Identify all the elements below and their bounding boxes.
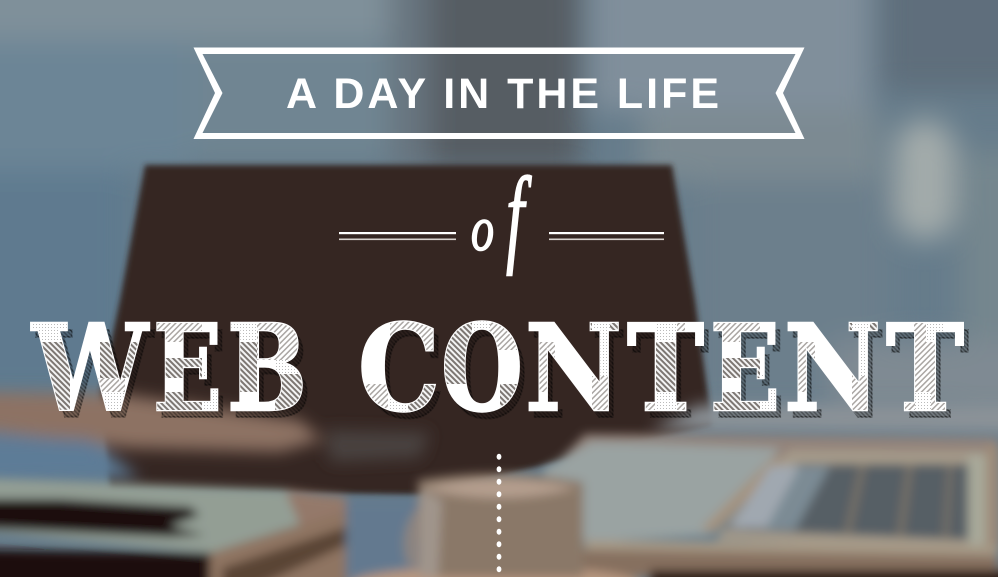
notebook pages xyxy=(210,510,346,577)
banner heading: A DAY IN THE LIFE xyxy=(286,70,719,118)
laptop keyboard edge xyxy=(700,458,790,532)
centre blue gap xyxy=(345,500,425,577)
keyboard mid area xyxy=(765,466,830,530)
title white lettering: N xyxy=(784,299,881,439)
laptop far right edge xyxy=(986,445,998,550)
banner ribbon xyxy=(194,48,804,139)
notebook cover xyxy=(0,478,345,553)
mug rim xyxy=(422,479,576,498)
saucer xyxy=(350,566,640,577)
title white lettering: B xyxy=(227,299,307,439)
laptop body xyxy=(542,442,780,542)
title white lettering: E xyxy=(710,299,780,439)
notebook page seam xyxy=(222,527,346,577)
title drop shadow: T xyxy=(891,306,969,446)
laptop key stripe xyxy=(897,464,913,538)
"of" divider xyxy=(339,156,664,276)
laptop keyboard xyxy=(725,464,968,540)
title drop shadow: C xyxy=(363,306,445,446)
title white lettering: T xyxy=(886,299,964,439)
title drop shadow: B xyxy=(232,306,312,446)
title drop shadow: W xyxy=(35,306,155,446)
dark strip under laptop xyxy=(650,570,998,577)
mug xyxy=(418,473,583,577)
title white lettering: W xyxy=(30,299,150,439)
title drop shadow xyxy=(35,306,969,446)
script word "of": o xyxy=(471,194,494,265)
left floor gap xyxy=(0,434,140,482)
pen on notebook xyxy=(0,499,205,537)
title white lettering: E xyxy=(153,299,222,439)
title drop shadow: N xyxy=(530,306,627,446)
script word "of": f xyxy=(506,156,532,276)
laptop key stripe xyxy=(943,464,953,540)
laptop key stripe xyxy=(844,464,866,536)
right table far edge xyxy=(650,405,998,432)
title drop shadow: N xyxy=(789,306,886,446)
mug highlight xyxy=(420,490,442,577)
laptop front edge xyxy=(580,550,998,577)
keyboard light area xyxy=(730,466,800,528)
script word "of" xyxy=(471,156,532,276)
main title: WEB CONTENT xyxy=(30,320,969,420)
mug handle xyxy=(404,505,430,566)
title white lettering xyxy=(30,299,964,439)
laptop right edge xyxy=(968,455,986,545)
left table edge xyxy=(0,392,322,452)
title white lettering: N xyxy=(525,299,622,439)
laptop front lip xyxy=(585,540,998,556)
title white lettering: C xyxy=(358,299,440,439)
laptop deck xyxy=(715,450,998,550)
laptop top edge xyxy=(560,434,998,460)
grey patch beside table edge xyxy=(325,430,430,462)
plaid hatch overlay on title xyxy=(30,320,945,414)
title white lettering: O xyxy=(441,299,523,439)
notebook cover tan corner xyxy=(285,490,346,525)
title white lettering: T xyxy=(627,299,704,439)
notebook dark side xyxy=(0,549,212,577)
dotted timeline line xyxy=(497,454,501,572)
title drop shadow: E xyxy=(715,306,785,446)
title drop shadow: T xyxy=(632,306,709,446)
chair xyxy=(100,165,712,495)
title drop shadow: E xyxy=(158,306,227,446)
title drop shadow: O xyxy=(446,306,528,446)
